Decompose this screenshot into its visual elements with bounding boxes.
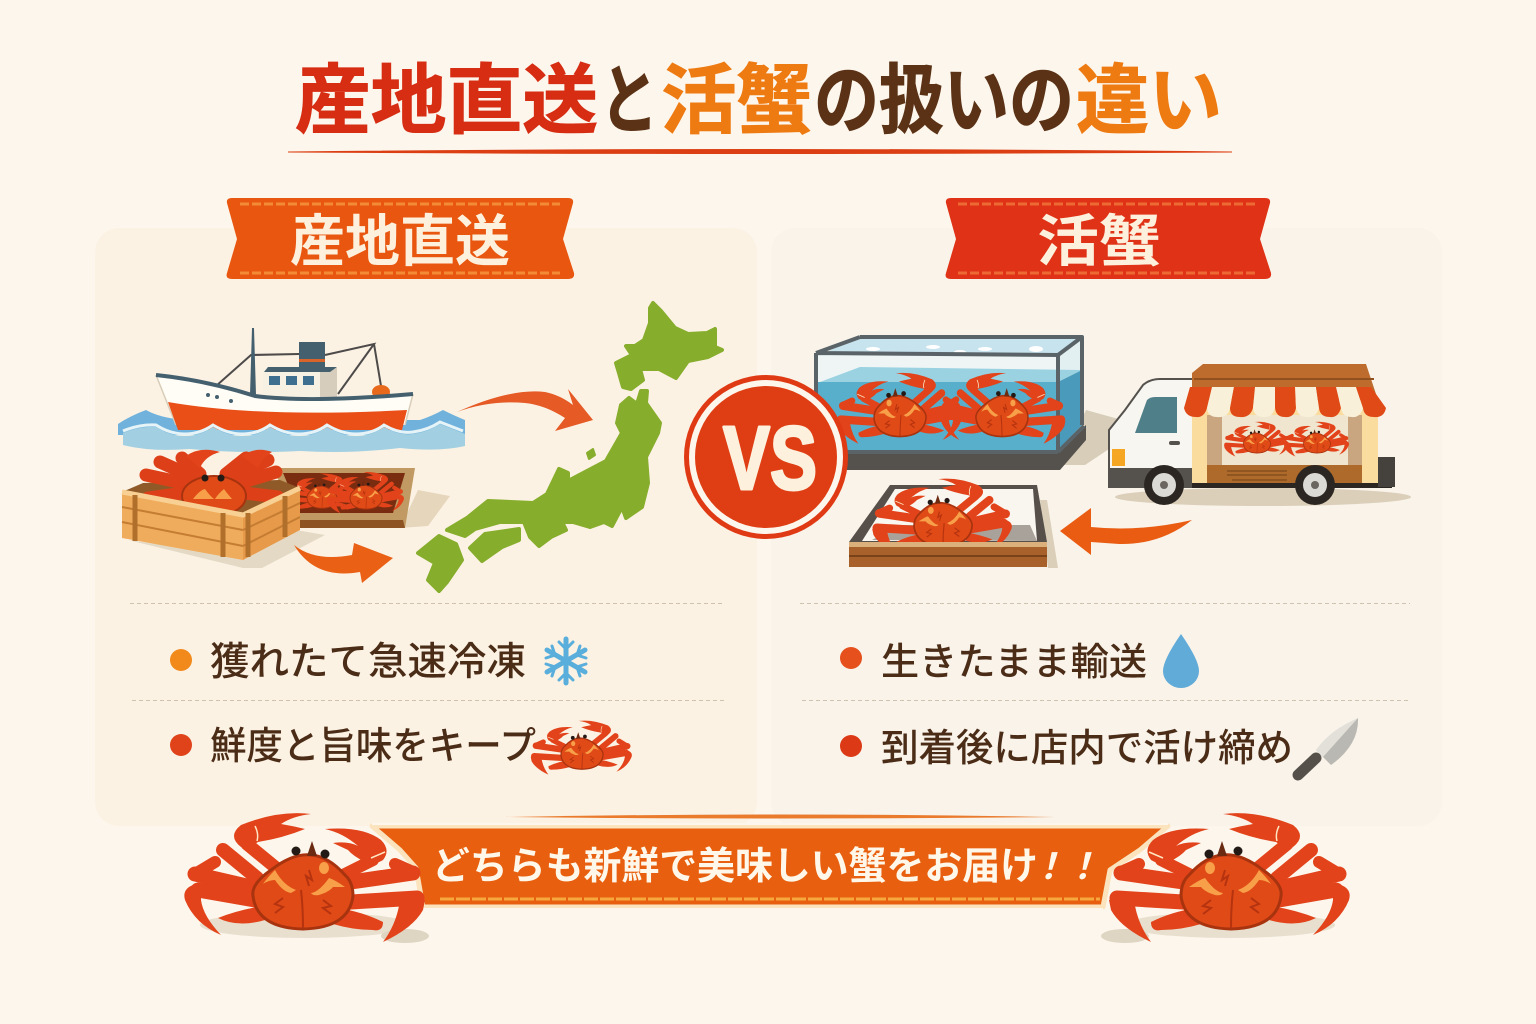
funnel [299, 342, 325, 367]
point: 獲れたて急速冷凍: 獲れたて急速冷凍 [210, 641, 526, 684]
arrow: crates to Japan [294, 543, 393, 583]
crate sides [122, 492, 243, 560]
title: 活蟹 [661, 59, 812, 144]
point: 鮮度と旨味をキープ: 鮮度と旨味をキープ [210, 726, 536, 768]
shop body [1192, 400, 1378, 484]
icon: snowflake [546, 639, 586, 683]
arrow: truck to tray [1060, 508, 1192, 555]
heading banner: 活蟹: 活蟹 [1037, 210, 1161, 273]
VS badge: VS [723, 409, 817, 509]
illustration: fishing boat on waves [118, 328, 465, 452]
cabin [263, 370, 323, 400]
crab mascot: right [1101, 813, 1350, 943]
illustration: live crab tank [816, 337, 1122, 470]
point: 生きたまま輸送: 生きたまま輸送 [881, 642, 1147, 684]
illustration: food truck shop [1109, 364, 1411, 506]
crabs in shop [1224, 422, 1289, 457]
VS badge [684, 375, 848, 539]
heading banner: 活蟹 [946, 198, 1271, 279]
arrow: boat to Japan [457, 389, 593, 431]
icon: small crab [531, 721, 632, 775]
icon: water drop [1163, 634, 1199, 688]
heading banner: 産地直送 [227, 198, 574, 279]
point: 到着後に店内で活け締め: 到着後に店内で活け締め [881, 728, 1293, 770]
illustration: crab on wooden tray [849, 479, 1058, 568]
front waves [123, 424, 465, 452]
back waves [118, 410, 465, 435]
title [295, 59, 1222, 144]
heading banner: 産地直送: 産地直送 [290, 210, 510, 273]
hull [156, 375, 413, 425]
roof [1192, 364, 1378, 400]
map: Japan [418, 303, 722, 591]
bottom ribbon: ！！ [1030, 846, 1100, 887]
back crate [400, 490, 450, 528]
icon: knife [1298, 718, 1358, 775]
wheels [1144, 465, 1335, 505]
crabs in tank [837, 373, 962, 444]
illustration: wooden crates of crab [122, 450, 450, 568]
title: と [600, 59, 658, 144]
front crate interior and crab [122, 480, 300, 515]
crab mascot: left [184, 813, 429, 943]
cab [1109, 379, 1195, 487]
title: の扱いの [814, 59, 1074, 144]
bottom ribbon: どちらも新鮮で美味しい蟹をお届け [432, 846, 1038, 888]
title: 違い [1076, 59, 1222, 144]
mast and rigging [216, 344, 381, 394]
title underline [288, 150, 1232, 154]
shadow [128, 530, 325, 568]
panel: 産地直送 background [95, 228, 757, 826]
dotted dividers [130, 604, 1410, 700]
panel: 活蟹 background [771, 228, 1442, 826]
awning stripes [1184, 387, 1386, 417]
title: 産地直送 [295, 59, 598, 144]
bottom ribbon [372, 814, 1168, 909]
